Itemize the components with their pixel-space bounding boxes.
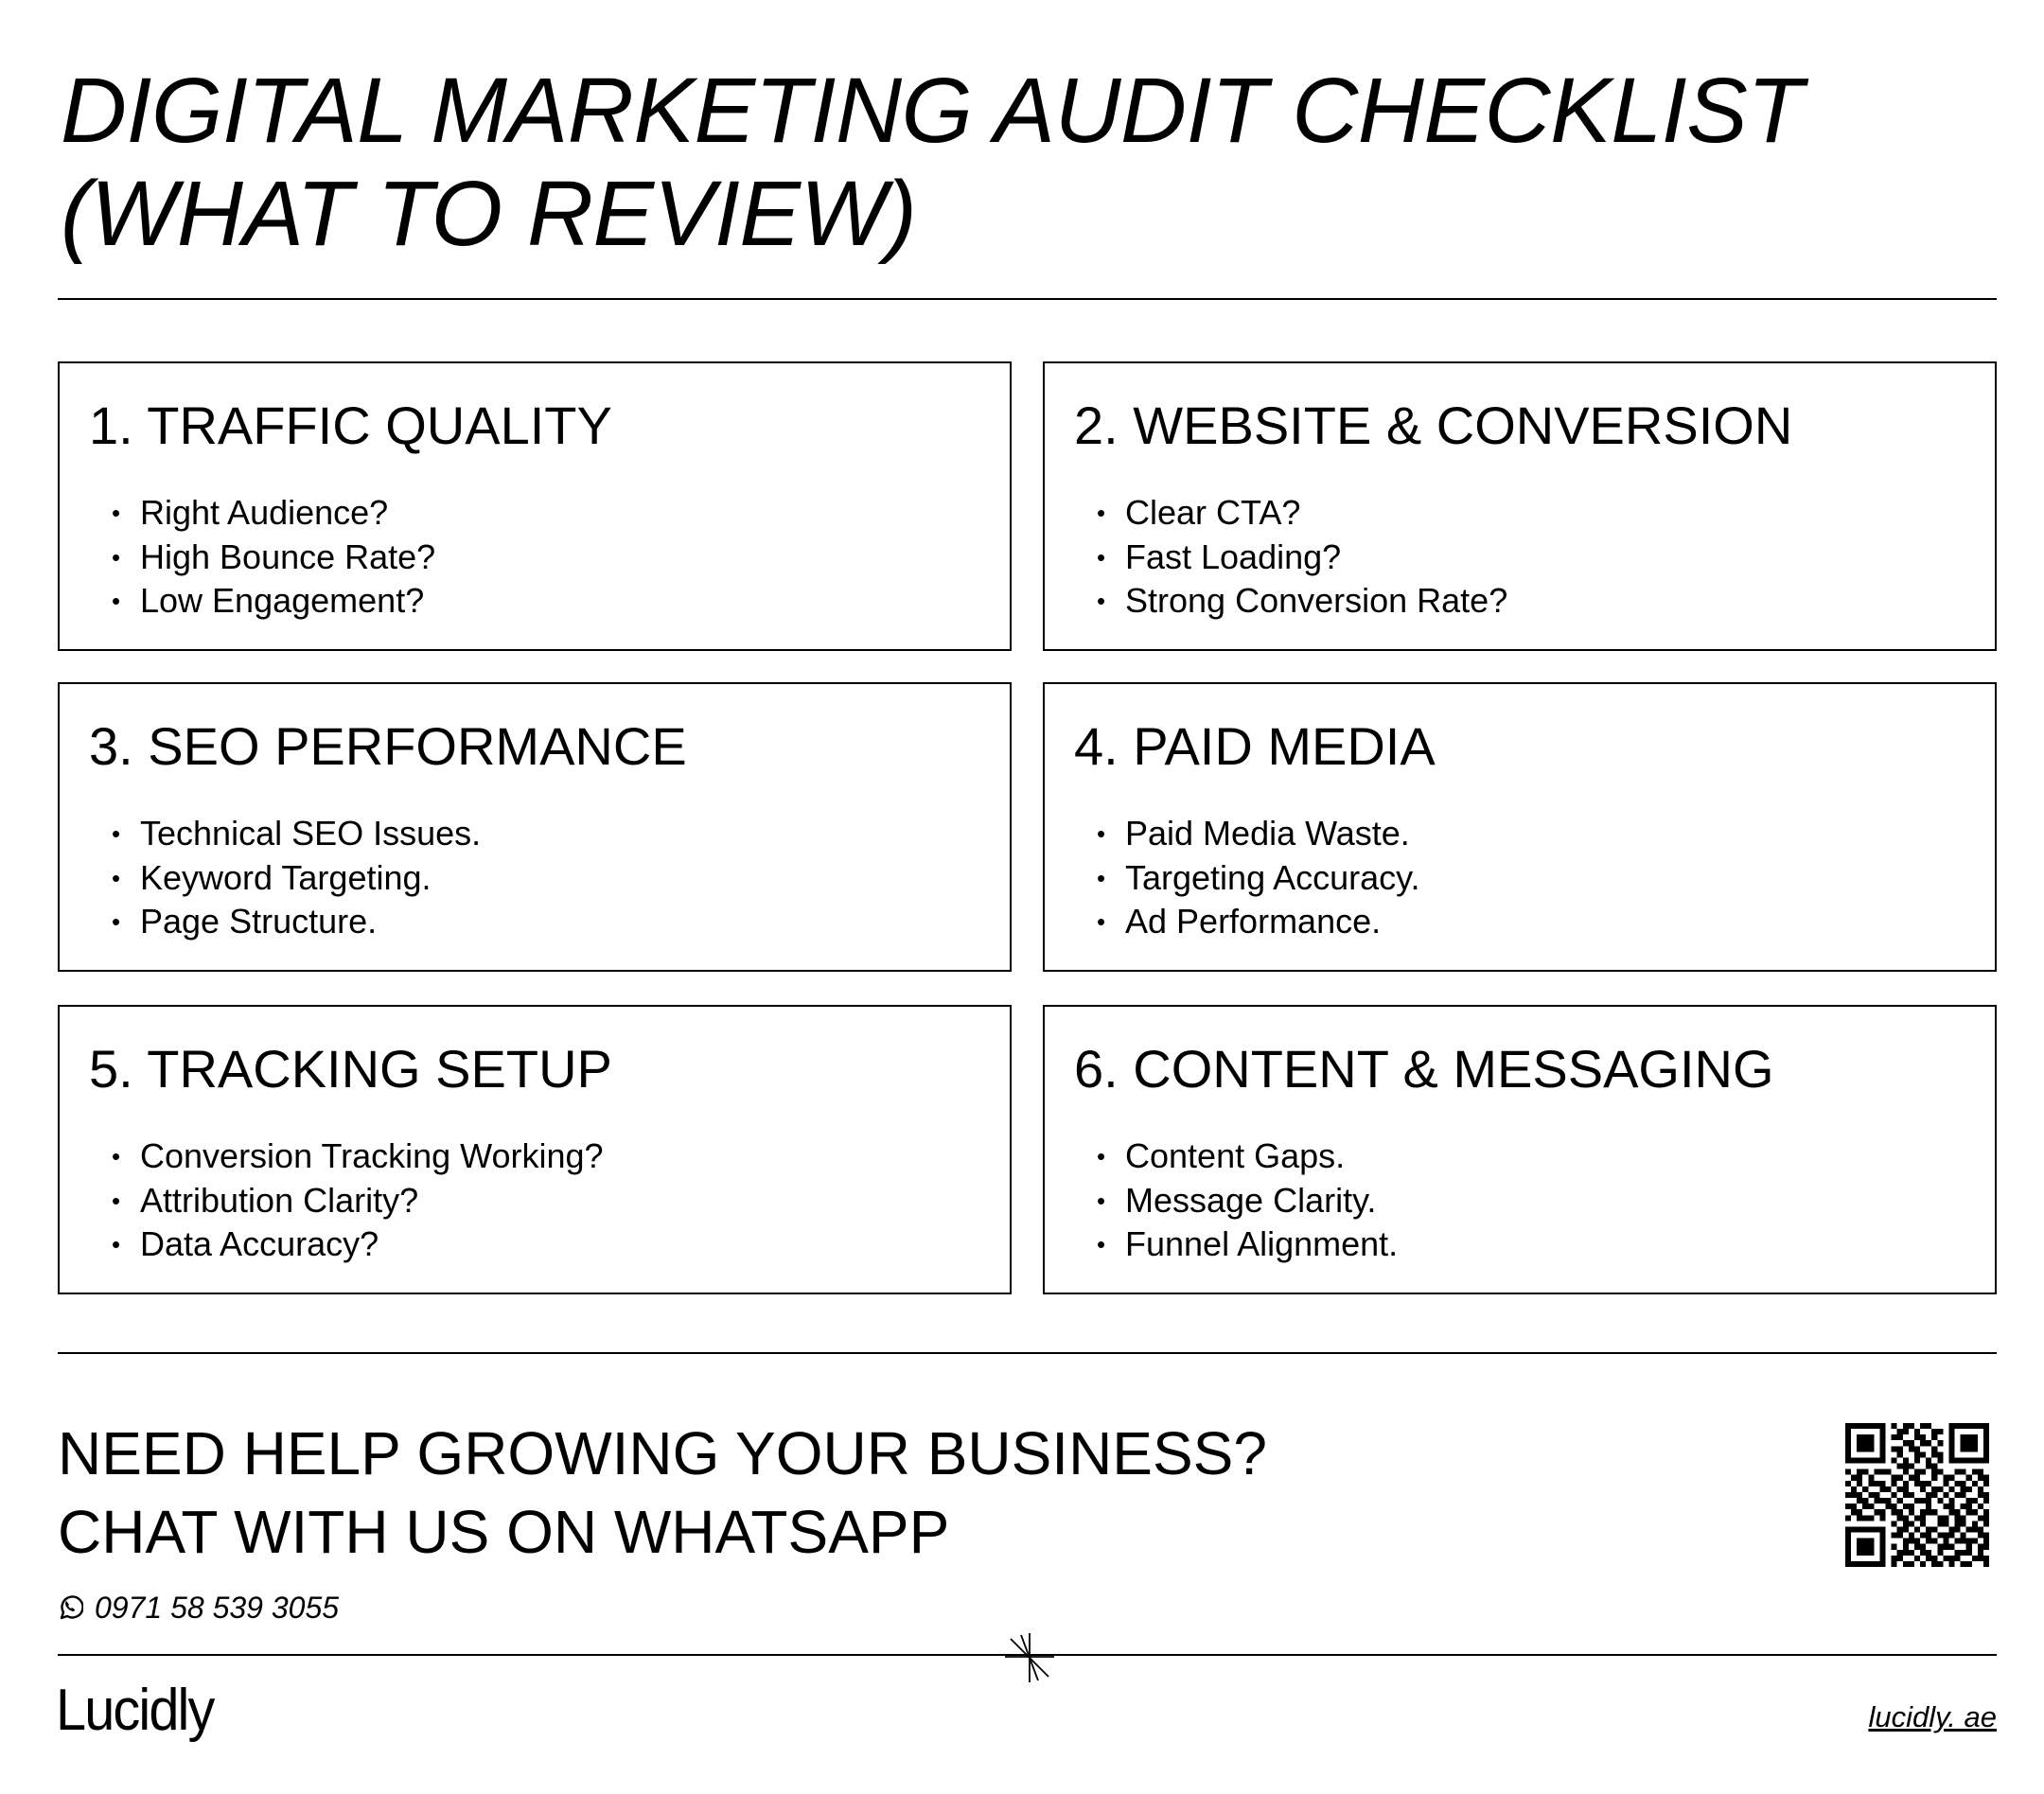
list: traffic quality [113,493,435,620]
heading: content & messaging: 6. CONTENT & MESSAGING [1074,1039,1774,1099]
panel: seo performance [58,682,1012,972]
list: paid media: Ad Performance. [1125,902,1381,941]
call to action [58,1419,1267,1566]
icon: star mark [1005,1633,1054,1682]
title: (WHAT TO REVIEW) [61,162,916,265]
list: seo performance [113,814,481,941]
list: content & messaging [1098,1136,1398,1263]
title [61,59,1809,265]
heading: tracking setup: 5. TRACKING SETUP [89,1039,612,1099]
list: content & messaging: Content Gaps. [1125,1136,1345,1175]
title: DIGITAL MARKETING AUDIT CHECKLIST [61,59,1803,162]
list: website & conversion: Strong Conversion Rate? [1125,581,1507,620]
list: tracking setup: Data Accuracy? [140,1224,379,1263]
list: website & conversion: Clear CTA? [1125,493,1300,532]
logo: lucidly: Lucidly [56,1678,213,1743]
list: seo performance: Technical SEO Issues. [140,814,481,853]
list: tracking setup [113,1136,604,1263]
call to action: NEED HELP GROWING YOUR BUSINESS? [58,1419,1267,1487]
list: content & messaging: Message Clarity. [1125,1181,1376,1219]
list: tracking setup: Conversion Tracking Working? [140,1136,604,1175]
list: seo performance: Keyword Targeting. [140,857,432,897]
list: content & messaging: Funnel Alignment. [1125,1224,1398,1263]
qr code [1845,1423,1989,1567]
panel: tracking setup [58,1005,1012,1294]
list: traffic quality: High Bounce Rate? [140,537,435,575]
panel: paid media [1043,682,1997,972]
icon: whatsapp [61,1595,83,1620]
phone contact: 0971 58 539 3055 [95,1591,339,1625]
list: seo performance: Page Structure. [140,902,377,941]
panel: website & conversion [1043,361,1997,651]
list: paid media [1098,814,1419,941]
panel: content & messaging [1043,1005,1997,1294]
list: paid media: Targeting Accuracy. [1125,857,1419,897]
list: traffic quality: Low Engagement? [140,581,424,620]
list: tracking setup: Attribution Clarity? [140,1181,418,1219]
call to action: CHAT WITH US ON WHATSAPP [58,1498,949,1566]
heading: website & conversion: 2. WEBSITE & CONVERSION [1074,396,1792,455]
list: traffic quality: Right Audience? [140,493,388,532]
website link: lucidly. ae [1868,1700,1997,1733]
panel: traffic quality [58,361,1012,651]
heading: paid media: 4. PAID MEDIA [1074,716,1436,776]
heading: seo performance: 3. SEO PERFORMANCE [89,716,687,776]
list: website & conversion: Fast Loading? [1125,537,1341,575]
list: paid media: Paid Media Waste. [1125,814,1410,853]
heading: traffic quality: 1. TRAFFIC QUALITY [89,396,612,455]
list: website & conversion [1098,493,1507,620]
